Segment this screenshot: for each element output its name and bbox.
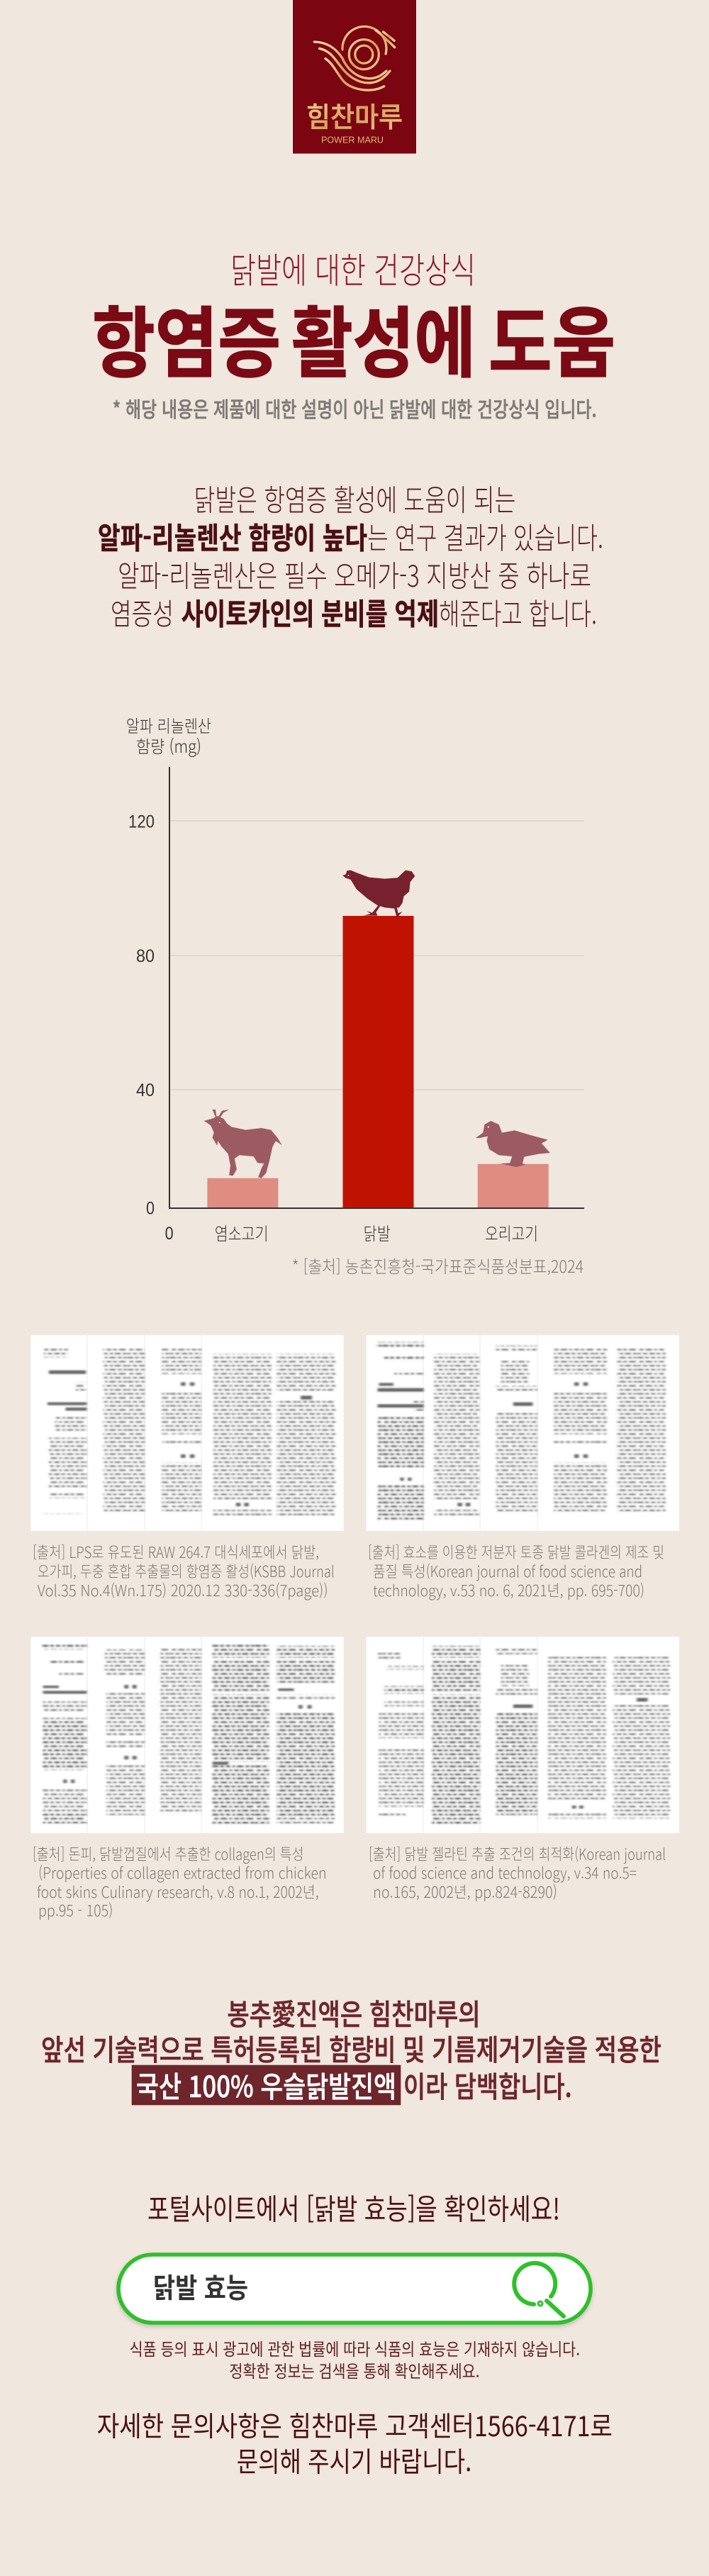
legal note: 식품 등의 표시 광고에 관한 법률에 따라 식품의 효능은 기재하지 않습니다. <box>130 2335 580 2360</box>
legal note <box>130 2335 580 2382</box>
icon: chicken silhouette <box>342 870 415 920</box>
main title: 도움 <box>489 282 615 393</box>
y-axis tick labels: 40 <box>136 1080 155 1100</box>
logo English name: POWER MARU <box>321 135 384 145</box>
research paper image 1 <box>30 1335 344 1531</box>
brand statement: 국산 100% 우슬닭발진액 <box>136 2063 396 2106</box>
x-axis category labels: 닭발 <box>363 1220 391 1246</box>
icon: goat silhouette <box>203 1110 282 1178</box>
highlight box <box>132 2065 401 2105</box>
y-axis title <box>126 712 211 758</box>
y-axis title: 함량 (mg) <box>136 733 201 758</box>
x-axis category labels: 오리고기 <box>485 1220 538 1246</box>
y-axis tick labels <box>128 812 174 1244</box>
caption: paper 2 <box>368 1540 664 1601</box>
caption: paper 4 <box>369 1842 666 1903</box>
main title: 활성에 <box>291 282 476 393</box>
x-axis category labels <box>215 1220 538 1246</box>
y-axis tick labels: 80 <box>136 946 155 966</box>
main title: 항염증 <box>92 282 281 393</box>
search keyword: 닭발 효능 <box>153 2267 248 2306</box>
logo Korean name: 힘찬마루 <box>306 96 403 136</box>
caption: paper 3: (Properties of collagen extracted from chicken <box>38 1861 326 1884</box>
y-axis tick labels: 120 <box>128 812 155 831</box>
logo emblem <box>314 26 395 90</box>
icon: magnifier <box>514 2263 564 2316</box>
caption: paper 3 <box>33 1842 326 1921</box>
intro paragraph: 닭발은 항염증 활성에 도움이 되는 <box>194 477 516 520</box>
y-axis tick labels: 0 <box>146 1199 155 1219</box>
caption: paper 3: pp.95 - 105) <box>38 1898 113 1921</box>
bar chart: alpha-linolenic acid content <box>126 712 584 1278</box>
caption: paper 2: technology, v.53 no. 6, 2021년, pp. 695-700) <box>373 1579 644 1601</box>
brand statement <box>41 1991 661 2106</box>
legal note: 정확한 정보는 검색을 통해 확인해주세요. <box>230 2357 479 2382</box>
caption: paper 1: Vol.35 No.4(Wn.175) 2020.12 330-336(7page)) <box>38 1579 328 1601</box>
bar: chicken feet <box>343 916 414 1208</box>
brand statement: 봉추愛진액은 힘찬마루의 <box>227 1991 481 2033</box>
icon: duck silhouette <box>476 1121 550 1167</box>
brand statement: 이라 담백합니다. <box>403 2063 572 2106</box>
intro paragraph: 는 연구 결과가 있습니다. <box>367 515 603 558</box>
y-axis tick labels: 0 <box>165 1224 174 1244</box>
contact information: 자세한 문의사항은 힘찬마루 고객센터1566-4171로 <box>97 2405 613 2445</box>
disclaimer note: * 해당 내용은 제품에 대한 설명이 아닌 닭발에 대한 건강상식 입니다. <box>113 392 597 424</box>
caption: paper 4: of food science and technology, v.34 no.5= <box>373 1861 637 1884</box>
caption: paper 3: [출처] 돈피, 닭발껍질에서 추출한 collagen의 특성 <box>33 1842 304 1864</box>
intro paragraph <box>98 477 603 634</box>
caption: paper 1: [출처] LPS로 유도된 RAW 264.7 대식세포에서 닭발, <box>33 1540 319 1563</box>
contact information: 문의해 주시기 바랍니다. <box>237 2440 471 2480</box>
chart source: * [출처] 농촌진흥청-국가표준식품성분표,2024 <box>292 1253 584 1278</box>
subtitle: 닭발에 대한 건강상식 <box>230 243 476 294</box>
intro paragraph: 사이토카인의 분비를 억제 <box>182 590 439 634</box>
intro paragraph: 염증성 <box>111 590 174 634</box>
intro paragraph: 알파-리놀렌산은 필수 오메가-3 지방산 중 하나로 <box>118 553 591 596</box>
search prompt heading: 포털사이트에서 [닭발 효능]을 확인하세요! <box>147 2185 560 2228</box>
main title <box>92 282 615 393</box>
intro paragraph: 해준다고 합니다. <box>439 590 597 634</box>
research paper image 2 <box>367 1335 679 1531</box>
research paper image 3 <box>30 1637 344 1833</box>
intro paragraph: 알파-리놀렌산 함량이 높다 <box>98 515 367 558</box>
x-axis category labels: 염소고기 <box>215 1220 269 1246</box>
search bar <box>118 2255 591 2323</box>
caption: paper 2: 품질 특성(Korean journal of food science and <box>373 1559 642 1582</box>
caption: paper 1 <box>33 1540 335 1601</box>
bar: goat meat <box>207 1178 278 1208</box>
logo: Power Maru <box>292 0 417 154</box>
research paper image 4 <box>367 1637 679 1833</box>
bar: duck meat <box>478 1164 549 1208</box>
contact information <box>97 2405 613 2480</box>
caption: paper 4: no.165, 2002년, pp.824-8290) <box>373 1880 557 1903</box>
caption: paper 1: 오가피, 두충 혼합 추출물의 항염증 활성(KSBB Journal <box>38 1559 335 1582</box>
y-axis title: 알파 리놀렌산 <box>126 712 211 737</box>
caption: paper 3: foot skins Culinary research, v.8 no.1, 2002년, <box>37 1880 319 1903</box>
